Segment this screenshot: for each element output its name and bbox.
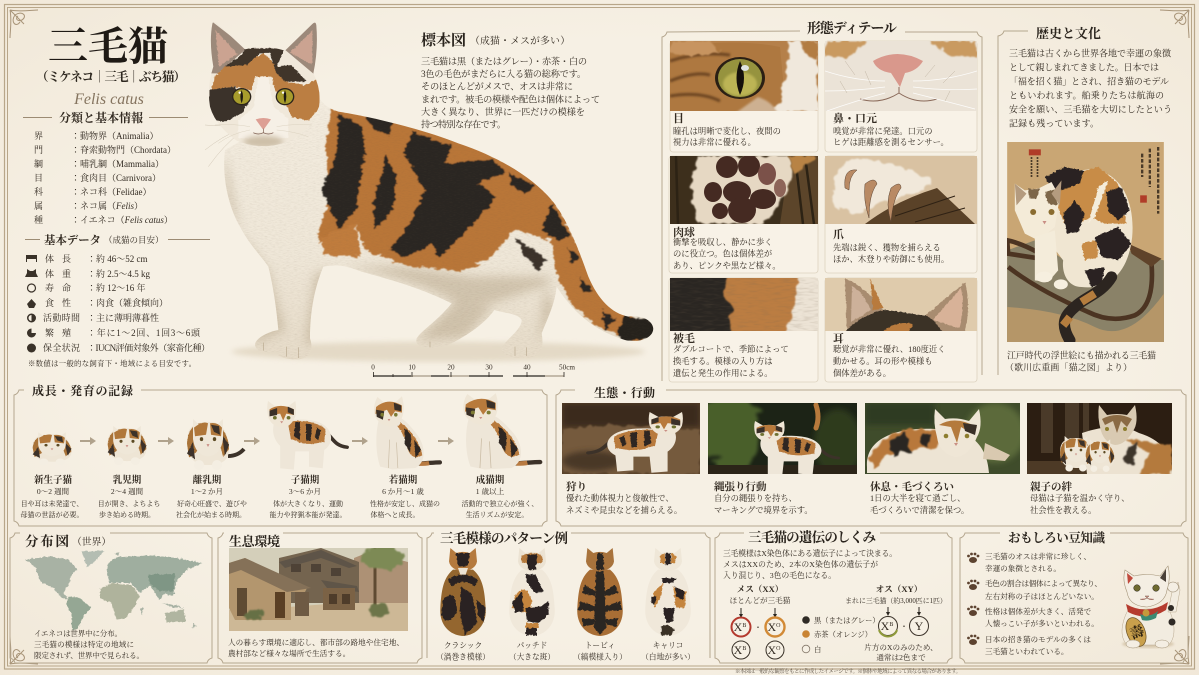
trivia text: 性格は個体差が大きく、活発で bbox=[985, 606, 1092, 616]
habitat image bbox=[229, 548, 408, 631]
growth heading: 成長・発育の記録 bbox=[32, 383, 133, 398]
data rows: ：年に1〜2回、1回3〜6頭 bbox=[87, 327, 201, 338]
morphology captions: 衝撃を吸収し、静かに歩く bbox=[673, 237, 773, 247]
growth stage labels: 体格へと成長。 bbox=[370, 510, 420, 519]
morphology captions: 換毛する。模様の入り方は bbox=[673, 356, 773, 366]
data footnote: ※数値は一般的な飼育下・地域による目安です。 bbox=[28, 359, 196, 368]
growth arrows bbox=[80, 437, 454, 445]
growth: weaning kitten bbox=[187, 419, 244, 470]
morphology captions: 遺伝と発生の作用による。 bbox=[673, 368, 773, 378]
pattern labels bbox=[436, 641, 695, 662]
history heading: 歴史と文化 bbox=[1036, 26, 1101, 41]
morphology captions: 耳 bbox=[833, 331, 844, 345]
panel: genetics bbox=[715, 529, 952, 663]
morphology captions: 動かせる。耳の形や模様も bbox=[833, 356, 933, 366]
data rows: 寿 bbox=[45, 282, 54, 293]
genetics explanation: 入り混じり、3色の毛色になる。 bbox=[723, 570, 836, 580]
panel: ecology and behaviour bbox=[556, 385, 1186, 526]
female genotype: メス（XX） bbox=[737, 584, 783, 594]
taxonomy rows: 種 bbox=[34, 215, 43, 225]
distribution text: イエネコは世界中に分布。 bbox=[34, 628, 122, 638]
morphology captions: 瞳孔は明晰で変化し、夜間の bbox=[673, 126, 781, 136]
specimen description bbox=[421, 56, 600, 130]
habitat heading: 生息環境 bbox=[229, 534, 280, 549]
history text bbox=[1009, 48, 1172, 128]
pattern labels: トービィ bbox=[585, 641, 615, 650]
data rows: 体 bbox=[45, 268, 54, 279]
image: ears bbox=[825, 278, 977, 331]
distribution text bbox=[34, 628, 144, 660]
basic data section bbox=[25, 233, 210, 368]
male genotype: オス（XY） bbox=[876, 584, 922, 594]
growth stage labels: 離乳期 bbox=[193, 474, 222, 486]
growth stage labels: 6 か月〜1 歳 bbox=[382, 486, 424, 496]
morphology heading: 形態ディテール bbox=[807, 20, 897, 37]
growth stage labels: 1 歳以上 bbox=[476, 486, 505, 496]
distribution heading bbox=[25, 533, 111, 549]
specimen description: 三毛猫は黒（またはグレー）・赤茶・白の bbox=[421, 56, 587, 66]
specimen description: 持つ特別な存在です。 bbox=[421, 118, 506, 130]
female genotype: X bbox=[734, 620, 742, 634]
panel: trivia bbox=[960, 530, 1188, 663]
growth stage labels: 能力や狩猟本能が発達。 bbox=[270, 510, 346, 519]
trivia text: 人懐っこい子が多いといわれる。 bbox=[985, 618, 1099, 628]
ukiyo-e painting bbox=[1007, 142, 1164, 342]
lucky cat: 壽 bbox=[1128, 622, 1147, 643]
taxonomy rows: 目 bbox=[34, 173, 43, 183]
data rows: ：主に薄明薄暮性 bbox=[87, 312, 159, 323]
morphology captions: 個体差がある。 bbox=[833, 368, 891, 378]
distribution text: 三毛猫の模様は特定の地域に bbox=[34, 639, 134, 649]
growth stage labels: 生活リズムが安定。 bbox=[466, 510, 528, 519]
basic data heading: 基本データ bbox=[44, 233, 101, 247]
history text: として親しまれてきました。日本では bbox=[1009, 62, 1159, 72]
corner ornament: bottom right bbox=[1160, 636, 1189, 664]
history text: 三毛猫は古くから世界各地で幸運の象徴 bbox=[1009, 48, 1171, 58]
taxonomy rows: ：脊索動物門（Chordata） bbox=[71, 144, 176, 155]
taxonomy rows: ：ネコ科（Felidae） bbox=[71, 186, 152, 197]
taxonomy rows: 科 bbox=[34, 186, 43, 197]
trivia text: 左右対称の子はほとんどいない。 bbox=[985, 591, 1099, 601]
panel: coat patterns bbox=[427, 530, 710, 662]
morphology captions: ダブルコートで、季節によって bbox=[673, 344, 789, 354]
image: coat bbox=[670, 278, 818, 331]
growth: juvenile cat bbox=[267, 401, 347, 470]
allele legend: 黒（またはグレー） bbox=[814, 616, 880, 625]
female genotype: X bbox=[767, 643, 776, 657]
allele legend bbox=[802, 616, 880, 654]
pattern labels: クラシック bbox=[444, 641, 482, 650]
distribution heading: 分布図 bbox=[25, 533, 69, 549]
scale bar: 0 bbox=[371, 364, 375, 372]
pattern labels: （渦巻き模様） bbox=[436, 652, 490, 662]
growth stage labels: 体が大きくなり、運動 bbox=[273, 499, 343, 508]
specimen description: そのほとんどがメスで、オスは非常に bbox=[421, 80, 573, 92]
male genotype: 片方のXのみのため、 bbox=[864, 642, 938, 652]
data rows: ：肉食（雑食傾向） bbox=[87, 297, 168, 308]
history text: 「福を招く猫」とされ、招き猫のモデル bbox=[1009, 76, 1169, 86]
data rows: 命 bbox=[62, 282, 71, 293]
growth stage labels: 目や耳は未発達で、 bbox=[21, 499, 83, 508]
paw lines bbox=[263, 342, 527, 358]
taxonomy rows: ：食肉目（Carnivora） bbox=[71, 172, 161, 183]
cat eyes bbox=[232, 88, 294, 105]
pattern heading: 三毛模様のパターン例 bbox=[440, 530, 568, 546]
data rows: 保全状況 bbox=[43, 342, 80, 353]
pattern labels: パッチド bbox=[517, 641, 547, 650]
history text: 記録も残っています。 bbox=[1009, 118, 1099, 128]
genetics explanation: 三毛模様はX染色体にある遺伝子によって決まる。 bbox=[723, 548, 897, 558]
trivia text: 幸運の象徴とされる。 bbox=[985, 563, 1061, 573]
habitat text: 農村部など様々な場所で生活する。 bbox=[228, 648, 350, 658]
specimen description: 3色の毛色がまだらに入る猫の総称です。 bbox=[421, 68, 586, 79]
growth: young cat bbox=[374, 396, 440, 469]
data rows: ：約 46〜52 cm bbox=[87, 253, 148, 264]
male genotype bbox=[845, 584, 947, 662]
specimen description: まれです。被毛の模様や配色は個体によって bbox=[421, 94, 600, 104]
allele legend: 赤茶（オレンジ） bbox=[814, 630, 872, 639]
ecology captions: 狩り bbox=[566, 480, 587, 493]
pattern labels: （白地が多い） bbox=[641, 652, 695, 662]
data rows: 重 bbox=[62, 268, 71, 279]
whiskers bbox=[205, 125, 240, 167]
pattern cat: calico bbox=[645, 548, 691, 636]
trivia text: 三毛猫のオスは非常に珍しく、 bbox=[985, 551, 1091, 561]
specimen description: 大きく異なり、世界に一匹だけの模様を bbox=[421, 106, 585, 117]
body shading bbox=[224, 153, 555, 343]
growth stage labels: 新生子猫 bbox=[34, 474, 72, 486]
data rows: 性 bbox=[62, 297, 71, 308]
cat head bbox=[209, 22, 320, 146]
pattern cat: tabby bbox=[577, 548, 623, 636]
data rows: 食 bbox=[45, 297, 54, 308]
corner ornament: bottom left bbox=[10, 636, 38, 664]
taxonomy rows: 門 bbox=[34, 145, 43, 155]
cards background bbox=[669, 41, 977, 382]
trivia text: 毛色の割合は個体によって異なり、 bbox=[985, 578, 1102, 588]
morphology captions: のに役立つ。色は個体差が bbox=[673, 248, 772, 258]
cat nose bbox=[253, 118, 273, 134]
data rows: 体 bbox=[45, 253, 54, 264]
trivia heading: おもしろい豆知識 bbox=[1008, 530, 1105, 545]
painting caption bbox=[1005, 350, 1156, 372]
male genotype: 通常は2色まで bbox=[876, 652, 926, 662]
growth stage labels: 乳児期 bbox=[113, 474, 142, 486]
male genotype: ・ bbox=[900, 622, 908, 631]
ecology heading: 生態・行動 bbox=[594, 385, 655, 400]
growth stage labels: 2〜4 週間 bbox=[111, 487, 144, 496]
female genotype: O bbox=[776, 646, 781, 652]
growth stage labels: 歩き始める時期。 bbox=[99, 510, 155, 519]
habitat text: 人の暮らす環境に適応し、都市部の路地や住宅地、 bbox=[228, 637, 404, 647]
cat body bbox=[205, 93, 658, 363]
specimen heading: 標本図 bbox=[421, 31, 466, 49]
morphology captions: ほか、木登りや防御にも使用。 bbox=[833, 254, 949, 264]
ecology captions: 自分の縄張りを持ち、 bbox=[714, 493, 797, 503]
taxonomy rows: ：哺乳綱（Mammalia） bbox=[71, 158, 164, 169]
female genotype: O bbox=[776, 623, 781, 629]
morphology captions: 嗅覚が非常に発達。口元の bbox=[833, 126, 933, 136]
taxonomy rows: ：動物界（Animalia） bbox=[71, 130, 158, 141]
growth stage labels: 3〜6 か月 bbox=[289, 487, 321, 496]
ecology captions: 親子の絆 bbox=[1030, 480, 1072, 493]
pattern labels: （大きな斑） bbox=[509, 652, 555, 662]
scale bar: 40 bbox=[523, 364, 531, 372]
image: hunting bbox=[562, 403, 700, 474]
morphology captions: 爪 bbox=[833, 227, 844, 241]
taxonomy section bbox=[23, 110, 188, 225]
growth stage labels: 目が開き、よちよち bbox=[98, 499, 160, 508]
ecology captions: 1日の大半を寝て過ごし、 bbox=[870, 493, 965, 503]
scale bar bbox=[371, 364, 575, 377]
taxonomy heading: 分類と基本情報 bbox=[59, 110, 143, 125]
image: eye bbox=[670, 41, 818, 111]
history text: ともいわれます。船乗りたちは航海の bbox=[1009, 90, 1164, 100]
panel: history and culture bbox=[998, 26, 1172, 375]
growth stage labels: 活動的で独立心が強く、 bbox=[462, 499, 538, 508]
taxonomy rows: 綱 bbox=[34, 158, 43, 169]
image: parent and kittens bbox=[1027, 403, 1172, 474]
title: 三毛猫 bbox=[48, 24, 168, 69]
footer note: ※本図は一般的な観察をもとに作成したイメージです。※個体や地域によって異なる場合があります。 bbox=[735, 667, 961, 675]
image: territory bbox=[708, 403, 857, 474]
ecology captions: 母猫は子猫を温かく守り、 bbox=[1030, 493, 1130, 503]
morphology captions: 目 bbox=[673, 112, 684, 125]
data rows: 殖 bbox=[62, 327, 71, 338]
taxonomy rows: ：イエネコ（Felis catus） bbox=[71, 215, 173, 225]
basic data heading: （成猫の目安） bbox=[104, 235, 164, 245]
pattern cat: classic bbox=[440, 548, 486, 636]
morphology captions: 聴覚が非常に優れ、180度近く bbox=[833, 344, 946, 354]
taxonomy rows: ：ネコ属（Felis） bbox=[71, 201, 143, 211]
genetics heading: 三毛猫の遺伝のしくみ bbox=[748, 529, 876, 545]
ecology captions: 休息・毛づくろい bbox=[870, 480, 954, 493]
morphology captions: 肉球 bbox=[673, 225, 695, 239]
genetics explanation: メスはXXのため、2本のX染色体の遺伝子が bbox=[723, 559, 878, 569]
scale bar: 20 bbox=[447, 364, 455, 372]
genetics explanation bbox=[723, 548, 897, 580]
female genotype bbox=[730, 584, 791, 659]
female genotype: ・ bbox=[754, 623, 762, 632]
image: nose bbox=[825, 41, 977, 111]
scale bar: 30 bbox=[485, 364, 493, 372]
trivia text: 三毛猫といわれている。 bbox=[985, 646, 1069, 656]
panel: growth record bbox=[14, 383, 547, 526]
habitat text bbox=[228, 637, 404, 658]
trivia text: 日本の招き猫のモデルの多くは bbox=[985, 634, 1091, 644]
scale bar: 10 bbox=[408, 364, 416, 372]
female genotype: B bbox=[742, 623, 746, 629]
painting caption: 江戸時代の浮世絵にも描かれる三毛猫 bbox=[1007, 350, 1156, 360]
data rows bbox=[43, 253, 210, 353]
data rows: ：約 2.5〜4.5 kg bbox=[87, 268, 151, 279]
female genotype: X bbox=[734, 643, 742, 657]
male genotype: まれに三毛猫（約3,000匹に1匹） bbox=[845, 596, 947, 605]
ecology captions: 優れた動体視力と俊敏性で、 bbox=[566, 493, 674, 503]
growth stage labels: 0〜2 週間 bbox=[37, 487, 70, 496]
painting caption: （歌川広重画「猫之図」より） bbox=[1005, 362, 1132, 372]
morphology captions bbox=[673, 111, 949, 378]
growth stage labels: 母猫の世話が必要。 bbox=[20, 510, 84, 519]
growth stage labels bbox=[20, 474, 538, 519]
lucky cat bbox=[1122, 566, 1180, 649]
scale bar: 50cm bbox=[559, 364, 575, 372]
image: resting bbox=[865, 403, 1020, 474]
image: claws bbox=[825, 156, 977, 224]
taxonomy rows: 属 bbox=[34, 201, 43, 211]
growth stage labels: 子猫期 bbox=[291, 474, 320, 486]
main cat illustration bbox=[205, 17, 658, 363]
morphology captions: ヒゲは距離感を測るセンサー。 bbox=[833, 137, 949, 147]
growth stage labels: 成猫期 bbox=[476, 474, 505, 486]
paw bullets bbox=[967, 553, 979, 645]
distribution text: 限定されず、世界中で見られる。 bbox=[34, 650, 144, 660]
specimen heading bbox=[421, 31, 570, 49]
morphology captions: 視力は非常に優れる。 bbox=[673, 137, 756, 147]
ecology captions: ネズミや昆虫などを捕らえる。 bbox=[566, 505, 682, 515]
female genotype: B bbox=[742, 646, 746, 652]
ecology captions: 社会性を教える。 bbox=[1030, 505, 1096, 515]
taxonomy rows: 界 bbox=[34, 131, 43, 141]
specimen heading: （成猫・メスが多い） bbox=[470, 34, 570, 47]
pattern labels: キャリコ bbox=[653, 641, 683, 650]
basic data heading bbox=[25, 233, 210, 247]
alternate names: （ミケネコ｜三毛｜ぶち猫） bbox=[36, 69, 186, 84]
allele legend: 白 bbox=[814, 645, 821, 654]
trivia text bbox=[985, 551, 1102, 656]
growth stage labels: 性格が安定し、成猫の bbox=[370, 499, 440, 508]
morphology captions: 被毛 bbox=[673, 331, 695, 345]
image: paw pads bbox=[670, 156, 818, 224]
face whiskers bbox=[215, 124, 312, 143]
male genotype: X bbox=[881, 619, 889, 633]
morphology captions: 先端は鋭く、獲物を捕らえる bbox=[833, 242, 941, 252]
data rows: 活動時間 bbox=[43, 312, 80, 323]
panel: distribution map bbox=[10, 533, 212, 663]
growth stage labels: 1〜2 か月 bbox=[191, 487, 223, 496]
pattern labels: （縞模様入り） bbox=[573, 652, 627, 662]
corner ornament: top left bbox=[10, 10, 38, 38]
ecology captions bbox=[566, 480, 1130, 515]
scientific name: Felis catus bbox=[73, 91, 144, 108]
growth: newborn kitten bbox=[33, 432, 71, 465]
male genotype: Y bbox=[915, 619, 924, 633]
growth: infant kitten bbox=[108, 426, 146, 465]
ecology captions: 縄張り行動 bbox=[714, 480, 767, 493]
male genotype: B bbox=[889, 622, 893, 628]
history text: 安全を願い、三毛猫を大切にしたという bbox=[1009, 104, 1172, 114]
growth: adult cat bbox=[463, 393, 540, 469]
female genotype: X bbox=[767, 620, 776, 634]
data rows: 繁 bbox=[45, 327, 54, 338]
world map bbox=[25, 551, 203, 630]
data rows: ：IUCN評価対象外（家畜化種） bbox=[87, 342, 210, 353]
data rows: ：約 12〜16 年 bbox=[87, 282, 146, 293]
panel: morphology details bbox=[662, 20, 982, 382]
morphology captions: 鼻・口元 bbox=[833, 111, 877, 125]
specimen text block bbox=[421, 31, 600, 130]
data icons bbox=[25, 255, 38, 352]
corner ornament: top right bbox=[1160, 10, 1189, 38]
ground shadow bbox=[232, 342, 645, 362]
distribution heading: （世界） bbox=[72, 535, 111, 548]
panel: habitat bbox=[218, 533, 422, 663]
pattern cat: patched bbox=[509, 548, 555, 636]
female genotype: ほとんどが三毛猫 bbox=[730, 595, 791, 605]
taxonomy rows bbox=[34, 130, 176, 225]
morphology captions: あり、ピンクや黒など様々。 bbox=[673, 260, 781, 270]
growth stage labels: 社会化が始まる時期。 bbox=[176, 510, 246, 519]
ecology captions: 毛づくろいで清潔を保つ。 bbox=[870, 505, 969, 515]
growth stage labels: 若猫期 bbox=[389, 474, 418, 486]
ecology captions: マーキングで境界を示す。 bbox=[714, 505, 813, 515]
growth stage labels: 好奇心旺盛で、遊びや bbox=[177, 499, 247, 508]
title block bbox=[36, 24, 186, 108]
data rows: 長 bbox=[62, 254, 71, 264]
